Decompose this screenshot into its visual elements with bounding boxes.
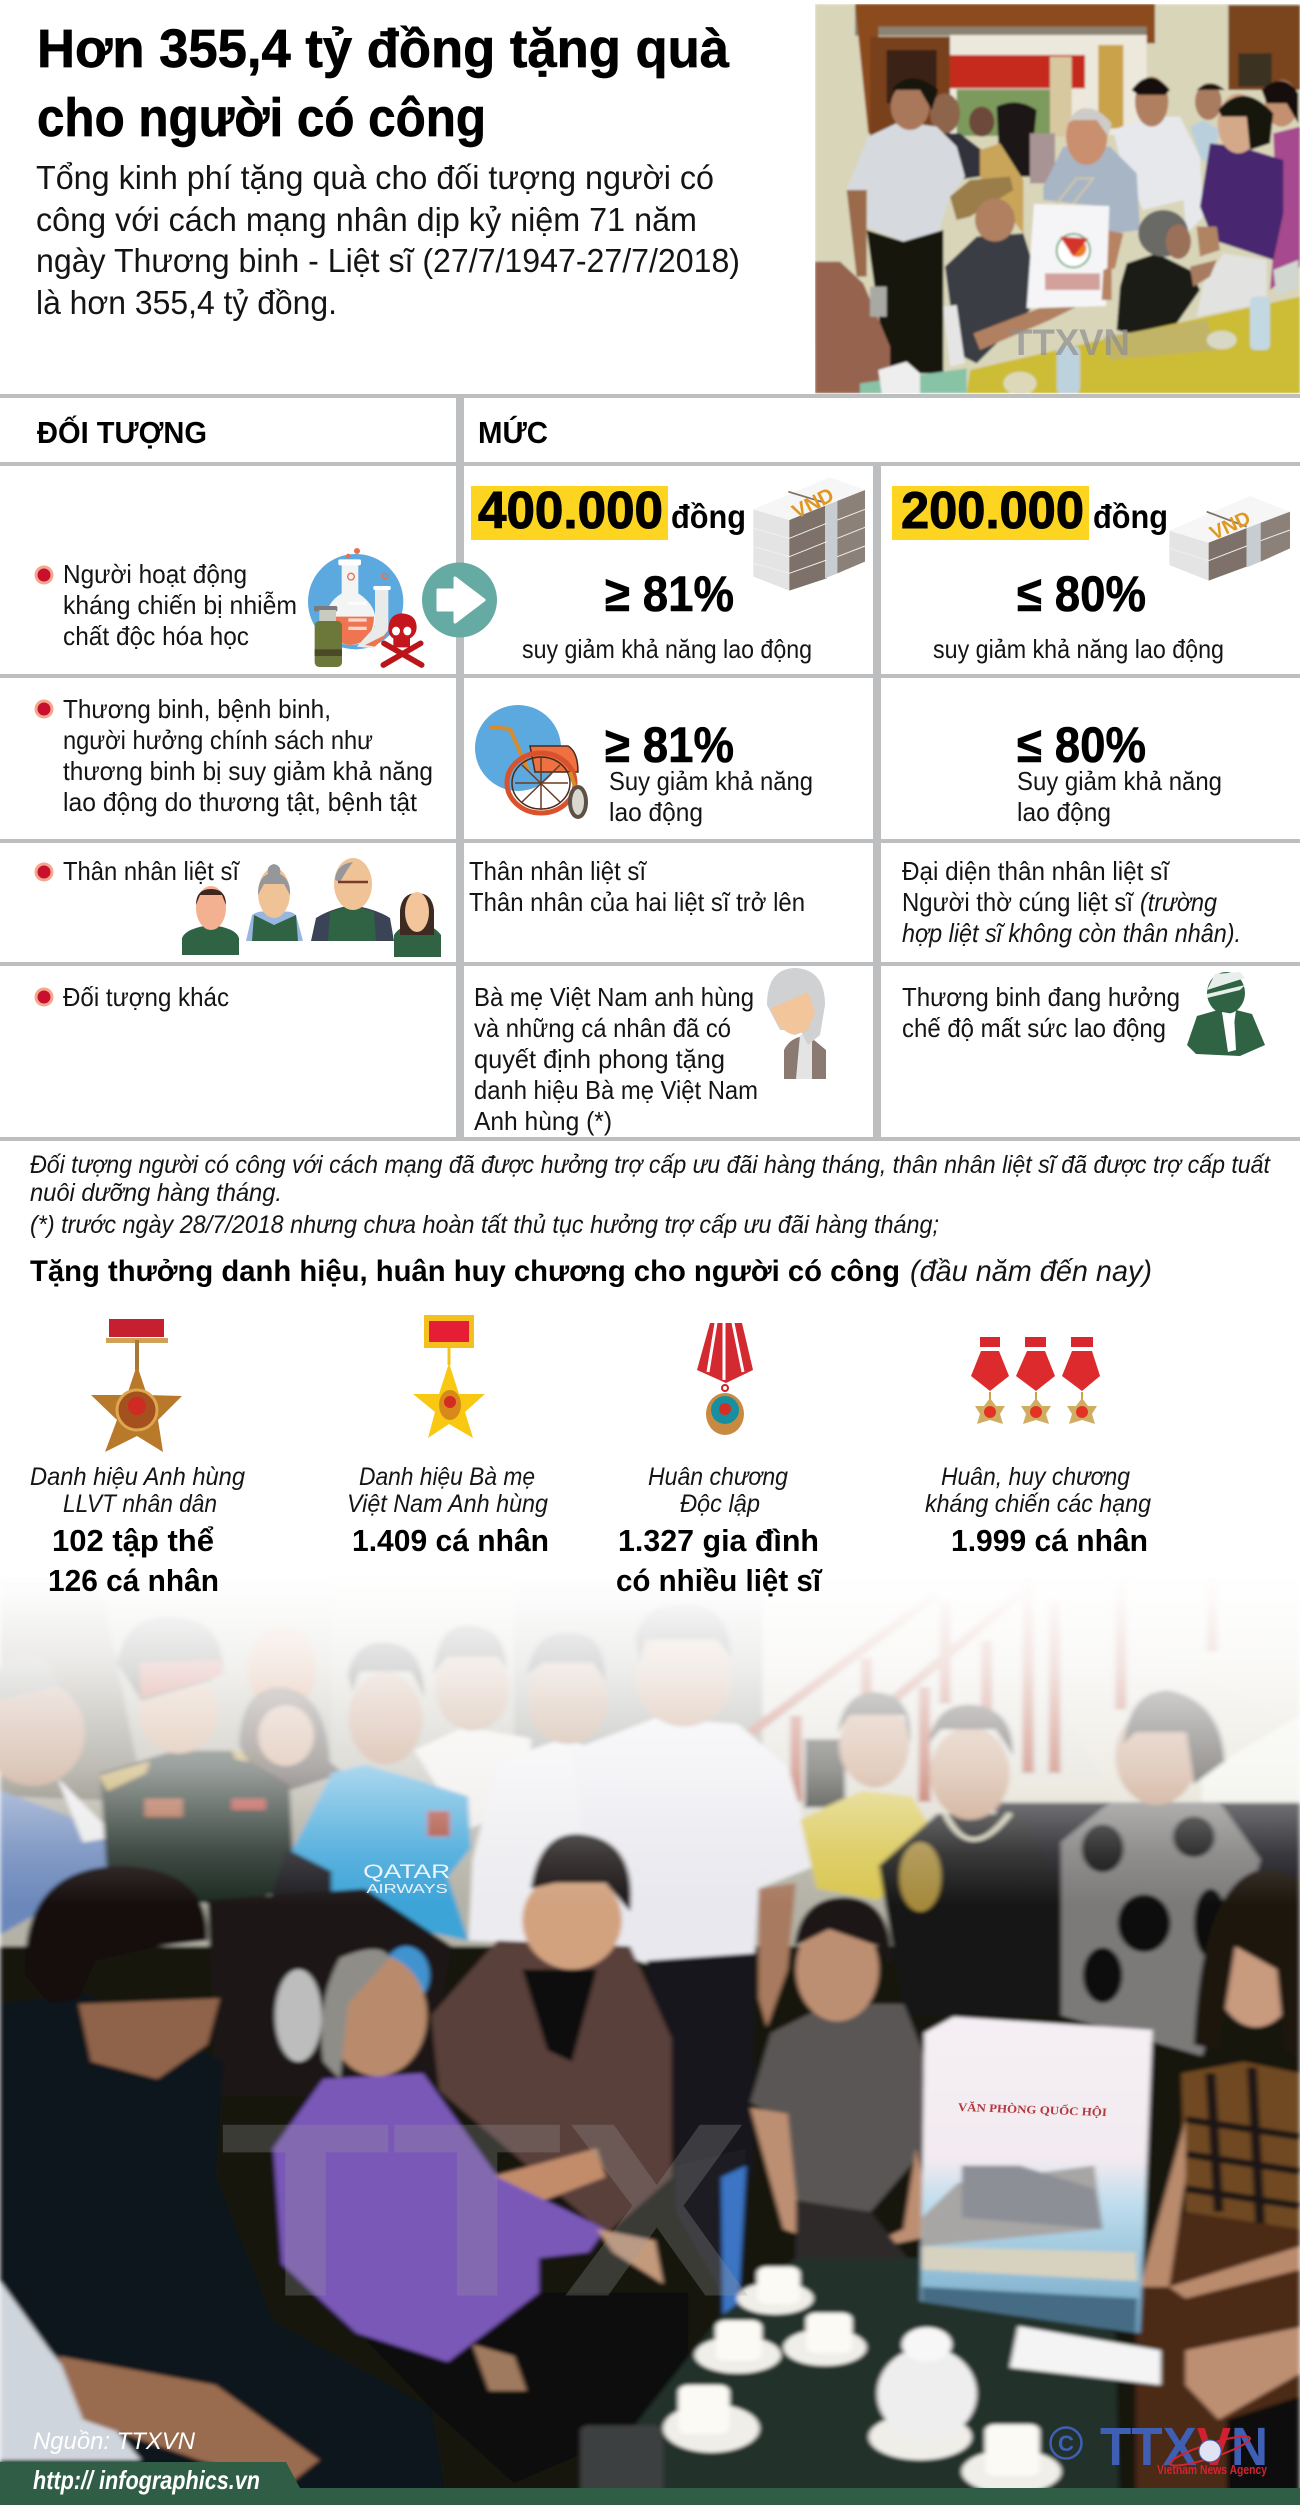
section heading: awards: (đầu năm đến nay) xyxy=(910,1255,1152,1288)
percent <= 80: suy giảm khả năng lao động xyxy=(933,634,1224,664)
icon: gold star medal xyxy=(91,1319,182,1452)
label: Người hoạt động xyxy=(63,559,247,589)
amount 400.000: đồng xyxy=(671,498,746,535)
col 2: danh hiệu Bà mẹ Việt Nam xyxy=(474,1075,758,1105)
icon: injured soldier xyxy=(1187,972,1265,1056)
icon: money stack small xyxy=(1169,496,1290,581)
col 2: Thân nhân liệt sĩ xyxy=(469,856,648,886)
bullet xyxy=(34,566,54,584)
bag label: VĂN PHÒNG QUỐC HỘI xyxy=(957,2099,1108,2119)
logo: TTXVN: TTXVN xyxy=(1100,2417,1268,2477)
section heading: awards: Tặng thưởng danh hiệu, huân huy chương cho người có công xyxy=(30,1255,900,1288)
award 2 xyxy=(347,1315,549,1558)
col 3: Người thờ cúng liệt sĩ xyxy=(902,887,1135,917)
intro text: Tổng kinh phí tặng quà cho đối tượng người có xyxy=(36,159,714,196)
watermark: TTX xyxy=(220,2072,752,2349)
col 3 xyxy=(902,982,1180,1043)
caption: Huân chương xyxy=(648,1463,788,1491)
caption xyxy=(30,1463,245,1518)
people group xyxy=(930,93,960,133)
table header: MỨC xyxy=(478,414,548,450)
row 1: chemical victims xyxy=(34,477,1290,667)
caption: kháng chiến các hạng xyxy=(925,1490,1151,1518)
table header xyxy=(37,414,548,450)
value: 1.327 gia đình xyxy=(618,1523,819,1558)
col 3: Thương binh đang hưởng xyxy=(902,982,1180,1012)
footnote xyxy=(30,1151,1271,1239)
shirt print: QATAR xyxy=(363,1861,450,1883)
back row xyxy=(0,1680,85,1786)
percent >= 81 xyxy=(605,717,813,827)
icon: family xyxy=(182,858,441,957)
footer band xyxy=(0,2428,1300,2505)
intro text: công với cách mạng nhân dịp kỷ niệm 71 năm xyxy=(36,201,697,238)
percent <= 80: ≤ 80% xyxy=(1017,566,1146,622)
table and objects xyxy=(967,297,1300,393)
icon: money stack large xyxy=(753,477,865,591)
arrow xyxy=(422,562,497,638)
col 2: Anh hùng (*) xyxy=(474,1106,612,1136)
value: có nhiều liệt sĩ xyxy=(616,1563,823,1598)
icon: yellow star medal xyxy=(413,1315,485,1438)
seated man left xyxy=(0,1992,448,2505)
percent >= 81: suy giảm khả năng lao động xyxy=(522,634,812,664)
label: người hưởng chính sách như xyxy=(63,725,373,755)
caption: Danh hiệu Bà mẹ xyxy=(359,1463,535,1491)
caption xyxy=(648,1463,788,1518)
table and tea set xyxy=(632,2255,1122,2488)
table header: ĐỐI TƯỢNG xyxy=(37,414,207,450)
table grid xyxy=(0,394,1300,1141)
percent >= 81: lao động xyxy=(609,797,703,827)
bullet xyxy=(34,862,54,882)
right woman xyxy=(1136,2212,1300,2505)
col 3 xyxy=(902,856,1241,948)
icon: resistance orders xyxy=(971,1337,1100,1424)
title: Hơn 355,4 tỷ đồng tặng quà xyxy=(37,19,730,79)
label: lao động do thương tật, bệnh tật xyxy=(63,787,418,817)
fade of the photo into the page xyxy=(0,1565,1300,1905)
amount 200.000: đồng xyxy=(1093,498,1168,535)
label: Đối tượng khác xyxy=(63,982,229,1012)
award 4 xyxy=(925,1337,1151,1558)
caption xyxy=(347,1463,548,1518)
col 2: quyết định phong tặng xyxy=(474,1044,725,1074)
bullet xyxy=(34,988,54,1006)
award 3 xyxy=(616,1323,823,1598)
col 3: hợp liệt sĩ không còn thân nhân). xyxy=(902,918,1241,948)
percent >= 81 xyxy=(522,566,812,664)
col 3: chế độ mất sức lao động xyxy=(902,1013,1166,1043)
caption: Huân, huy chương xyxy=(941,1463,1130,1491)
amount 400.000: 400.000 xyxy=(478,482,663,540)
col 2: Bà mẹ Việt Nam anh hùng xyxy=(474,982,754,1012)
caption: LLVT nhân dân xyxy=(63,1490,217,1518)
value: 102 tập thể xyxy=(52,1523,214,1558)
label: kháng chiến bị nhiễm xyxy=(63,590,297,620)
icon: money stack small: VND xyxy=(1207,507,1254,545)
chair xyxy=(207,1889,452,2096)
title xyxy=(37,19,730,148)
value xyxy=(48,1523,219,1598)
seated woman leopard xyxy=(675,2165,746,2288)
logo: TTXVN: C xyxy=(1058,2431,1074,2456)
percent <= 80: ≤ 80% xyxy=(1017,717,1146,773)
website: http:// infographics.vn xyxy=(33,2465,260,2495)
col 2: Thân nhân của hai liệt sĩ trở lên xyxy=(469,887,805,917)
value: 1.409 cá nhân xyxy=(352,1523,549,1558)
percent <= 80: lao động xyxy=(1017,797,1111,827)
logo: TTXVN: Vietnam News Agency xyxy=(1157,2462,1268,2477)
col 2: và những cá nhân đã có xyxy=(474,1013,731,1043)
percent <= 80 xyxy=(933,566,1224,664)
icon: chemistry, grenade and skull xyxy=(308,548,422,667)
label: chất độc hóa học xyxy=(63,621,249,651)
label xyxy=(63,694,433,817)
label: Thương binh, bệnh binh, xyxy=(63,694,331,724)
caption: Độc lập xyxy=(680,1490,760,1518)
stairs xyxy=(748,1614,996,1735)
old woman xyxy=(365,2293,688,2483)
percent >= 81: ≥ 81% xyxy=(605,717,734,773)
col 3: Đại diện thân nhân liệt sĩ xyxy=(902,856,1171,886)
footnote: nuôi dưỡng hàng tháng. xyxy=(30,1179,282,1207)
percent <= 80 xyxy=(1017,717,1222,827)
icon: elderly mother xyxy=(767,968,826,1079)
icon: money stack large: VND xyxy=(788,483,838,524)
caption xyxy=(925,1463,1151,1518)
woman in brown xyxy=(431,1941,672,2235)
percent <= 80: Suy giảm khả năng xyxy=(1017,766,1222,796)
row 3: martyr relatives xyxy=(34,856,1241,957)
label: Thân nhân liệt sĩ xyxy=(63,856,241,886)
watermark: TTXVN xyxy=(1010,322,1130,363)
title: cho người có công xyxy=(37,88,486,148)
caption: Danh hiệu Anh hùng xyxy=(30,1463,245,1491)
award 1 xyxy=(30,1319,245,1598)
amount 400.000 xyxy=(471,482,746,540)
intro text xyxy=(36,159,740,321)
icon: independence order xyxy=(697,1323,753,1435)
col 2 xyxy=(469,856,805,917)
source: Nguồn: TTXVN xyxy=(33,2428,196,2455)
percent >= 81: ≥ 81% xyxy=(605,566,734,622)
intro text: ngày Thương binh - Liệt sĩ (27/7/1947-27/7/2018) xyxy=(36,242,740,279)
amount 200.000 xyxy=(892,482,1168,540)
shirt print: AIRWAYS xyxy=(366,1883,448,1896)
intro text: là hơn 355,4 tỷ đồng. xyxy=(36,284,337,321)
bottom photo: visit to heroic mother xyxy=(0,1577,1300,2505)
label: thương binh bị suy giảm khả năng xyxy=(63,756,433,786)
icon: wheelchair xyxy=(475,705,586,817)
value: 126 cá nhân xyxy=(48,1563,219,1598)
caption: Việt Nam Anh hùng xyxy=(347,1490,548,1518)
col 3: (trường xyxy=(1140,887,1217,917)
shirt print xyxy=(364,1864,449,1893)
row 2: war invalids xyxy=(34,694,1222,827)
footnote: (*) trước ngày 28/7/2018 nhưng chưa hoàn tất thủ tục hưởng trợ cấp ưu đãi hàng tháng; xyxy=(30,1211,939,1239)
bullet xyxy=(34,700,54,718)
value xyxy=(616,1523,823,1598)
gift bag xyxy=(920,2017,1152,2333)
col 2 xyxy=(474,982,758,1136)
row 4: other beneficiaries xyxy=(34,968,1265,1136)
photo: gift presentation xyxy=(815,4,1300,395)
percent >= 81: Suy giảm khả năng xyxy=(609,766,813,796)
amount 200.000: 200.000 xyxy=(901,482,1084,540)
value: 1.999 cá nhân xyxy=(951,1523,1148,1558)
label xyxy=(63,559,297,651)
